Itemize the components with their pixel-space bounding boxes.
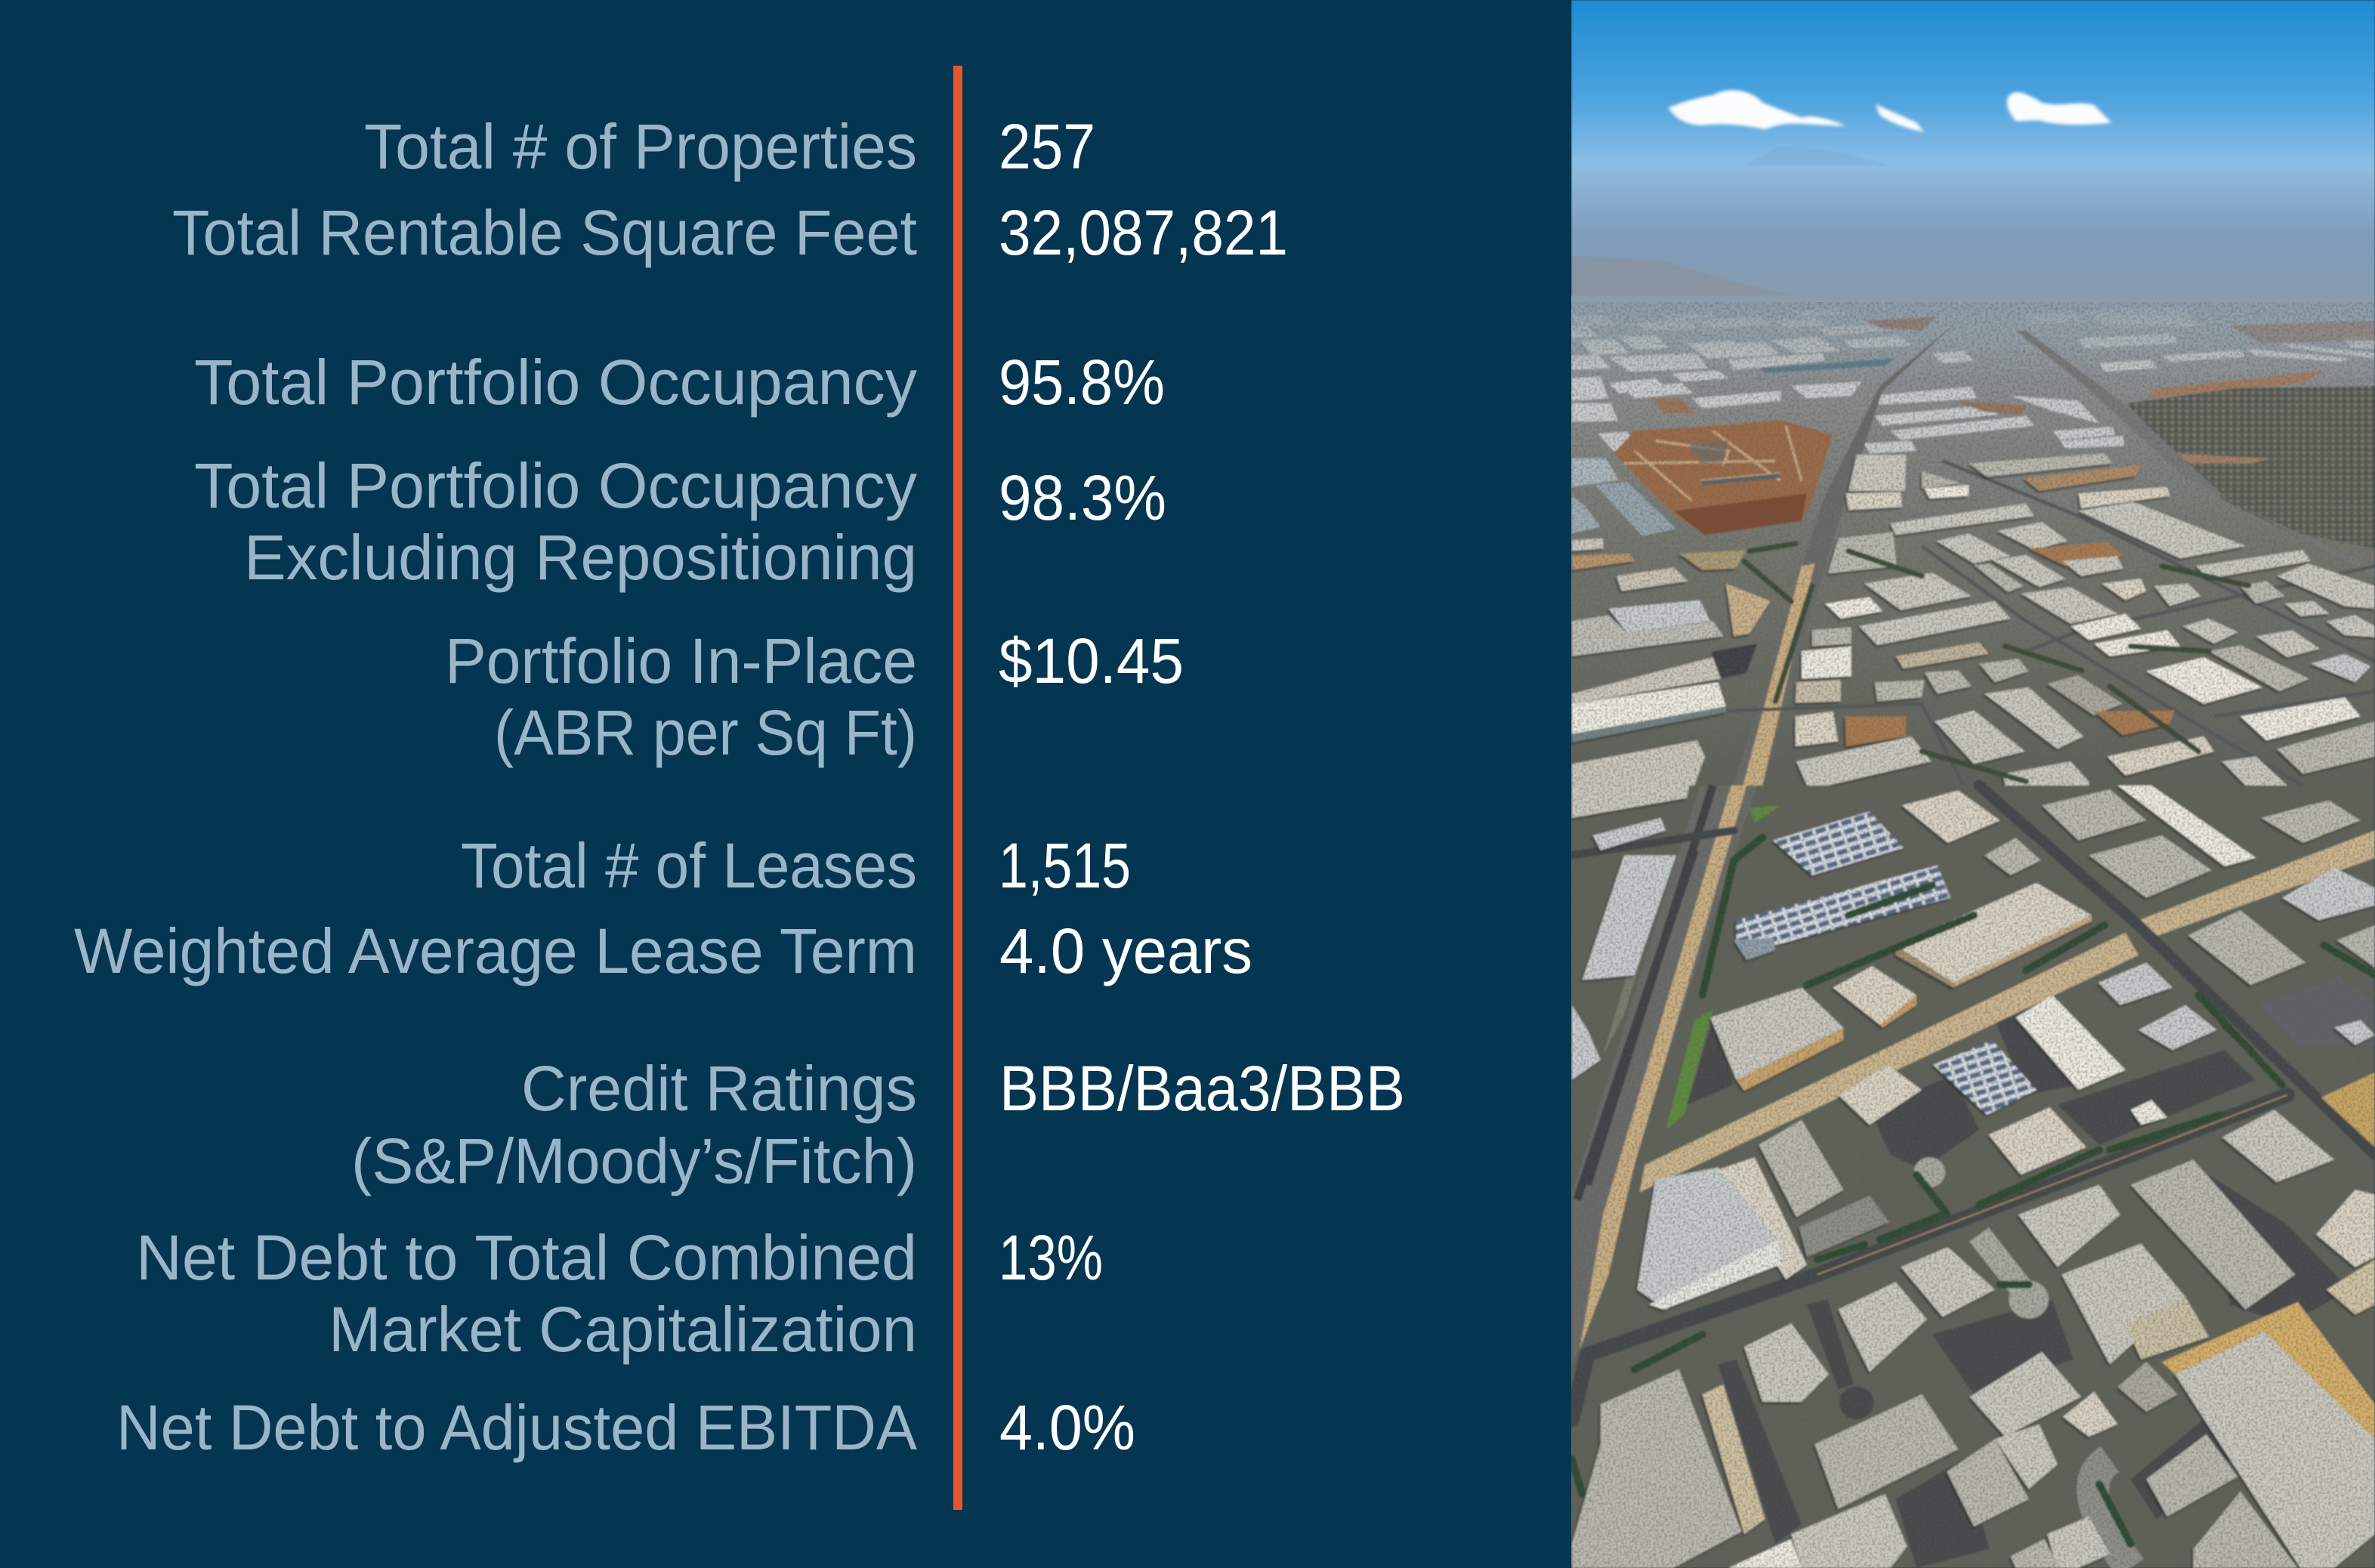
stat: Total # of Properties: Total # of Properties bbox=[364, 111, 917, 182]
stat: Net Debt to Total Combined Market Capitalization bbox=[136, 1222, 1103, 1365]
tan drainage canal bbox=[1640, 830, 2375, 1192]
stat: Net Debt to Total Combined Market Capitalization: 13% bbox=[999, 1222, 1103, 1293]
stat: Total Portfolio Occupancy: Total Portfolio Occupancy bbox=[194, 347, 917, 418]
stat: Portfolio In-Place ABR: Portfolio In-Place bbox=[445, 625, 917, 696]
tree lines bbox=[1572, 835, 2375, 1544]
stat: Total # of Properties: 257 bbox=[999, 111, 1095, 182]
stat: Occupancy Excluding Repositioning: 98.3% bbox=[999, 462, 1166, 533]
warehouse roofs bbox=[1572, 786, 2375, 1568]
far warehouse rows bbox=[1572, 306, 2375, 453]
clouds bbox=[1669, 91, 2111, 131]
arterial roads bbox=[1572, 786, 2375, 1419]
panel: navy background bbox=[0, 0, 1571, 1568]
stat: Net Debt to Total Combined Market Capitalization: Market Capitalization bbox=[329, 1294, 917, 1365]
stat: Total Rentable Square Feet bbox=[172, 197, 1288, 268]
stat: Total # of Leases: Total # of Leases bbox=[461, 830, 917, 901]
divider: orange vertical rule bbox=[953, 66, 962, 1510]
stat: Total Rentable Square Feet: Total Rentable Square Feet bbox=[172, 197, 917, 268]
stat: Weighted Average Lease Term: 4.0 years bbox=[999, 915, 1252, 986]
upper ground area bbox=[1556, 91, 2375, 786]
freeways bbox=[1713, 320, 2375, 786]
stat: Net Debt to Adjusted EBITDA: 4.0% bbox=[999, 1392, 1135, 1463]
stat: Portfolio In-Place ABR: (ABR per Sq Ft) bbox=[494, 697, 917, 768]
stat: Net Debt to Total Combined Market Capitalization: Net Debt to Total Combined bbox=[136, 1222, 917, 1293]
lower warehouse blocks bbox=[1572, 453, 2375, 786]
stat: Occupancy Excluding Repositioning: Total Portfolio Occupancy bbox=[194, 450, 917, 521]
tree lines bbox=[1744, 544, 2250, 782]
field patches bbox=[1653, 398, 1694, 413]
freeway and rail corridor bbox=[1572, 786, 1757, 1364]
photo: aerial view of industrial district bbox=[1556, 0, 2375, 1568]
lower ground area bbox=[1556, 786, 2375, 1568]
dark parking lots bbox=[1687, 1005, 2350, 1568]
photo grain bbox=[1571, 302, 2375, 1568]
stat: Total Rentable Square Feet: 32,087,821 bbox=[999, 197, 1288, 268]
stat: Weighted Average Lease Term: Weighted Average Lease Term bbox=[74, 915, 917, 986]
rooftop-solar warehouses bbox=[1734, 811, 2037, 1115]
stat: Total Portfolio Occupancy: 95.8% bbox=[999, 347, 1165, 418]
stat: Portfolio In-Place ABR bbox=[445, 625, 1184, 768]
haze over far district bbox=[1571, 295, 2375, 366]
stat: Credit Ratings: (S&P/Moody’s/Fitch) bbox=[351, 1125, 917, 1196]
green verges and fields bbox=[1666, 1010, 1713, 1130]
sky and haze bbox=[1571, 0, 2375, 313]
residential neighbourhood bbox=[2126, 386, 2375, 548]
cul-de-sacs bbox=[1839, 1157, 2130, 1568]
solar-clad warehouses left bbox=[1595, 482, 1676, 536]
stat: Credit Ratings bbox=[351, 1053, 1405, 1196]
stat: Portfolio In-Place ABR: $10.45 bbox=[999, 625, 1184, 696]
stat: Total # of Leases: 1,515 bbox=[999, 830, 1131, 901]
stat: Credit Ratings: Credit Ratings bbox=[521, 1053, 917, 1124]
stat: Net Debt to Adjusted EBITDA: Net Debt to Adjusted EBITDA bbox=[116, 1392, 917, 1463]
stat: Occupancy Excluding Repositioning: Excluding Repositioning bbox=[244, 522, 917, 593]
stat: Occupancy Excluding Repositioning bbox=[194, 450, 1166, 593]
stat: Credit Ratings: BBB/Baa3/BBB bbox=[999, 1053, 1405, 1124]
brown graded hillside bbox=[1614, 420, 1833, 535]
